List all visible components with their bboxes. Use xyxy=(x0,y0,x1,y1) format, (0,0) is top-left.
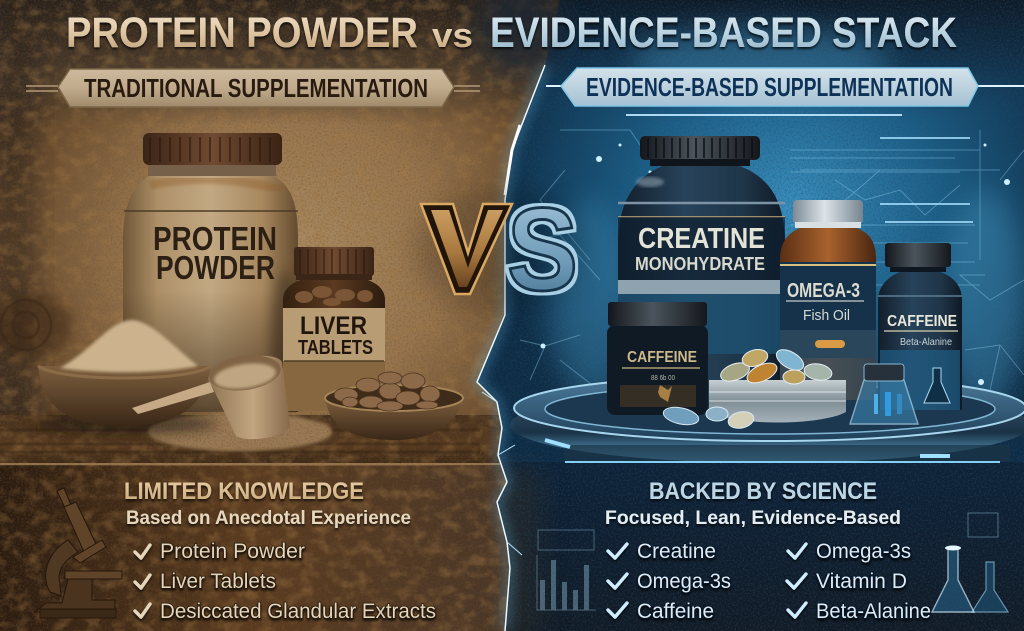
bottle: liver tablets: LIVER xyxy=(300,312,367,340)
circular platform xyxy=(510,375,1024,463)
jar: creatine monohydrate: MONOHYDRATE xyxy=(635,254,765,274)
jar: protein powder xyxy=(123,133,298,412)
list: evidence-based items: Omega-3s xyxy=(637,570,731,593)
heading: backed by science: BACKED BY SCIENCE xyxy=(649,478,877,505)
list: evidence-based items: Omega-3s xyxy=(816,540,911,563)
icon: microscope xyxy=(35,488,122,618)
icon: bar chart xyxy=(537,530,596,610)
list: evidence-based items xyxy=(608,540,931,623)
list: evidence-based items: Beta-Alanine xyxy=(816,600,931,623)
letter s: S xyxy=(507,184,578,316)
bowl of liver tablets xyxy=(325,372,463,440)
subheading: anecdotal experience: Based on Anecdotal Experience xyxy=(126,507,411,529)
list: traditional items: Liver Tablets xyxy=(160,570,276,593)
bottle: caffeine and beta-alanine xyxy=(878,243,962,410)
list: evidence-based items: Caffeine xyxy=(637,600,714,623)
title xyxy=(66,9,957,57)
text: limited knowledge xyxy=(124,478,436,623)
jar: caffeine xyxy=(607,302,708,415)
title: vs xyxy=(432,17,473,55)
banner: traditional supplementation xyxy=(26,69,480,107)
jar: protein powder: PROTEIN xyxy=(153,220,277,257)
list: traditional items: Protein Powder xyxy=(160,540,305,563)
heading: limited knowledge: LIMITED KNOWLEDGE xyxy=(124,478,364,505)
list: traditional items xyxy=(135,540,436,623)
list: evidence-based items: Creatine xyxy=(637,540,716,563)
title: PROTEIN POWDER xyxy=(66,9,418,57)
glass jar xyxy=(850,364,918,424)
letter v xyxy=(421,204,512,294)
bottle: caffeine and beta-alanine: CAFFEINE xyxy=(887,313,957,330)
banner: traditional supplementation: TRADITIONAL SUPPLEMENTATION xyxy=(84,73,428,103)
seam shadow at the top of the divide xyxy=(475,0,565,75)
bottle: omega-3 fish oil: OMEGA-3 xyxy=(787,280,860,302)
panel: traditional supplementation background xyxy=(0,0,560,631)
list: evidence-based items: Vitamin D xyxy=(816,570,907,593)
vs emblem xyxy=(415,184,585,316)
metal dish with capsules xyxy=(709,346,846,422)
subheading: focused, lean, evidence-based: Focused, Lean, Evidence-Based xyxy=(605,507,901,529)
jar: caffeine: 88 6b 00 xyxy=(651,375,675,382)
icon: science flasks xyxy=(932,513,1008,612)
bowl of protein powder xyxy=(33,320,217,434)
panel: evidence-based supplementation background xyxy=(450,0,1024,631)
jar: creatine monohydrate: CREATINE xyxy=(638,223,765,255)
loose capsules xyxy=(662,404,755,431)
bottle: caffeine and beta-alanine: Beta-Alanine xyxy=(900,336,952,348)
list: traditional items: Desiccated Glandular Extracts xyxy=(160,600,436,623)
lightning divider xyxy=(477,65,545,631)
bottle: liver tablets xyxy=(271,247,385,411)
bottle: omega-3 fish oil: Fish Oil xyxy=(803,307,850,324)
jar: caffeine: CAFFEINE xyxy=(627,349,697,366)
measuring scoop xyxy=(132,351,290,439)
bottle: omega-3 fish oil xyxy=(780,200,876,400)
powder pile xyxy=(148,412,332,451)
bottle: liver tablets: TABLETS xyxy=(298,337,373,359)
jar: creatine monohydrate xyxy=(618,136,785,400)
title: EVIDENCE-BASED STACK xyxy=(490,9,957,57)
text: backed by science xyxy=(605,478,931,623)
jar: protein powder: POWDER xyxy=(156,249,275,286)
